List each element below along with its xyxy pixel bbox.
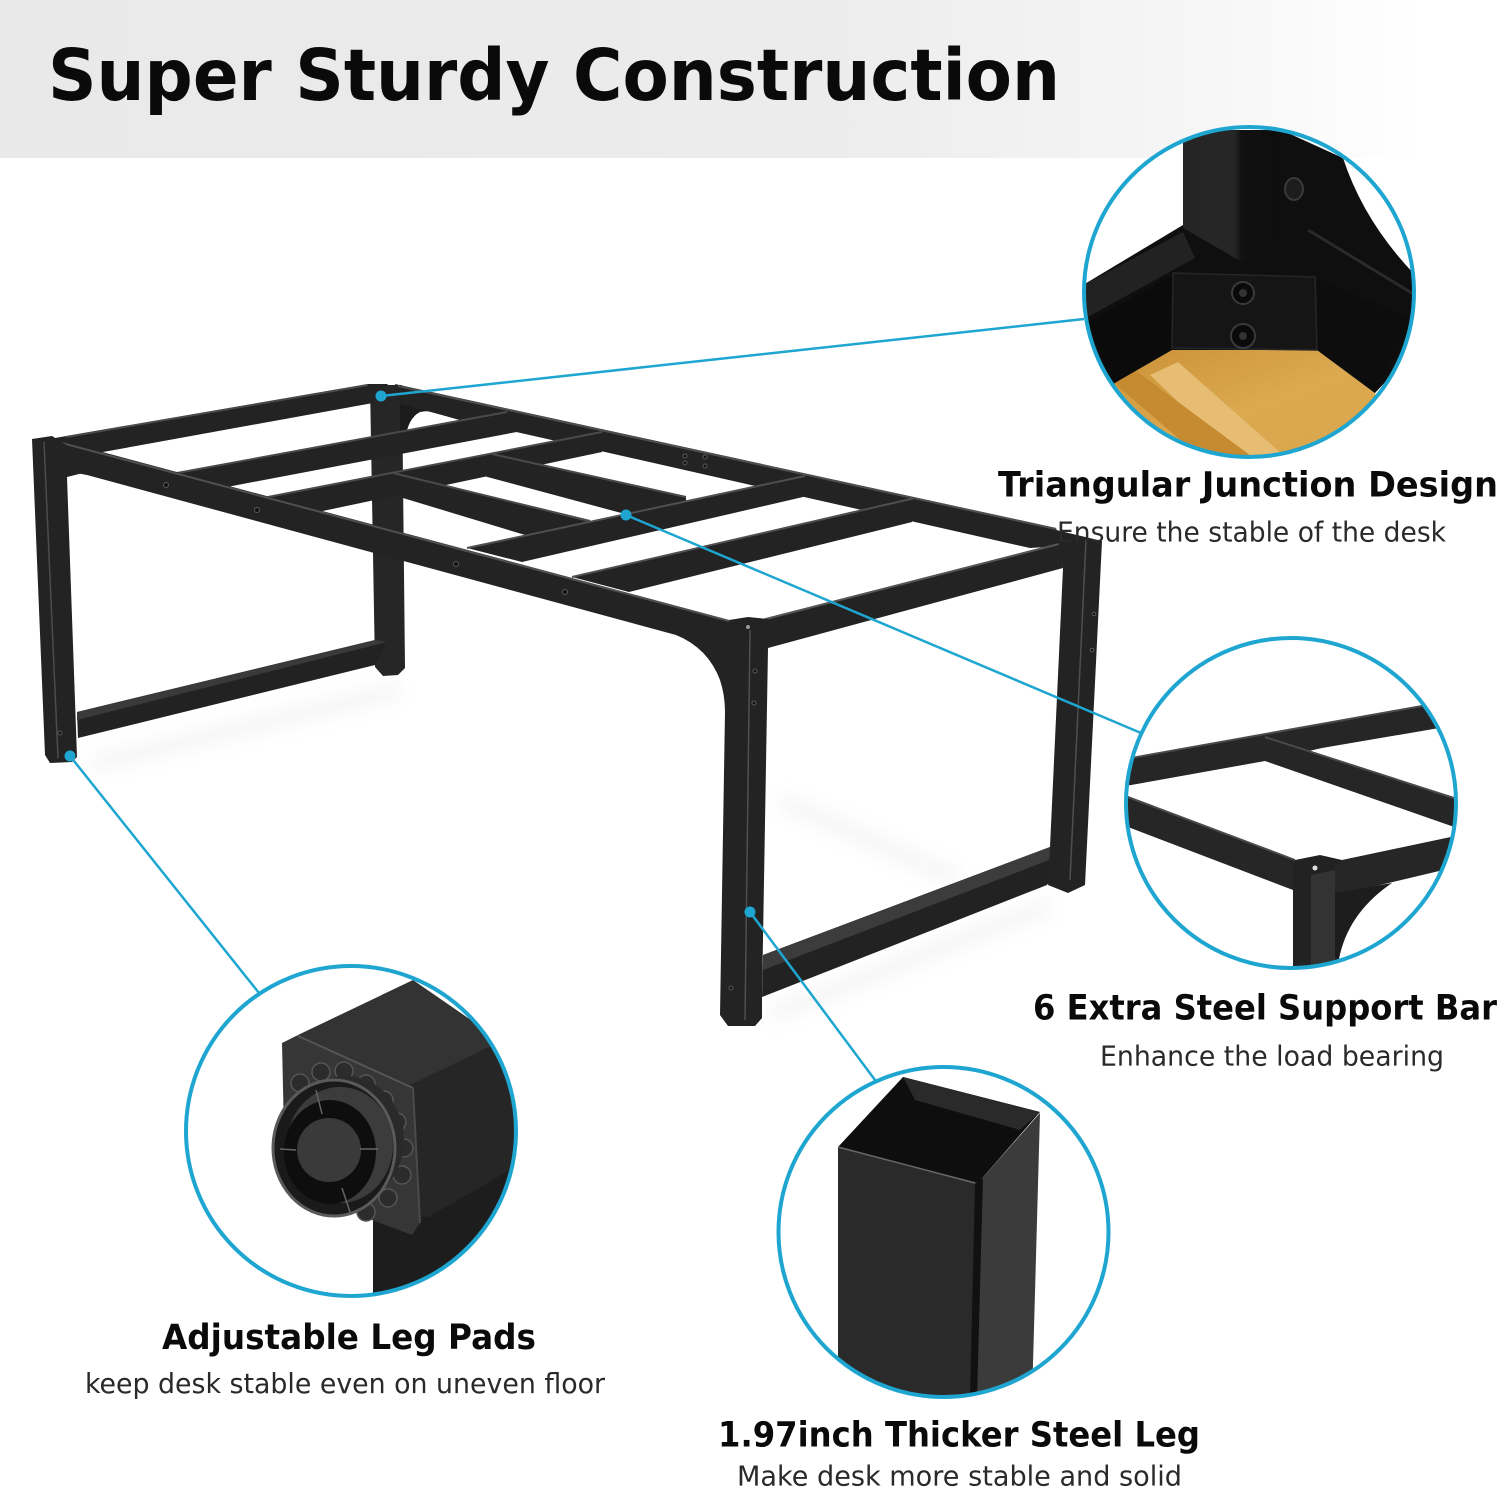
heading: thicker steel leg: 1.97inch Thicker Steel Leg — [718, 1416, 1200, 1456]
title: Super Sturdy Construction — [48, 34, 1060, 117]
front long rail — [50, 438, 768, 660]
support bar 4 — [572, 497, 915, 592]
header band — [0, 0, 1500, 158]
right lower bar — [762, 847, 1070, 997]
right leg — [1048, 530, 1102, 893]
circle: thicker steel leg detail — [778, 1066, 1110, 1400]
support bar 3 — [467, 475, 805, 562]
back left leg — [370, 385, 405, 676]
front corner leg with gusset — [676, 624, 768, 1026]
circle: adjustable leg pad detail — [185, 965, 525, 1300]
subtext: leg pads: keep desk stable even on uneven floor — [85, 1367, 605, 1400]
floor shadows — [90, 690, 1050, 1015]
subtext: support bar: Enhance the load bearing — [1100, 1040, 1444, 1072]
back short rail — [55, 384, 388, 452]
left lower bar — [77, 640, 387, 738]
heading: adjustable leg pads: Adjustable Leg Pads — [162, 1318, 536, 1358]
circle: triangular junction detail — [1083, 126, 1420, 470]
circle: support bar detail — [1120, 637, 1460, 975]
desk frame illustration — [32, 384, 1102, 1026]
subtext: triangular junction: Ensure the stable of the desk — [1057, 516, 1447, 548]
support bar 1 — [177, 411, 522, 487]
back long rail — [395, 384, 1062, 548]
longitudinal support bar 1 — [393, 473, 590, 538]
callout: leg pad line — [64, 750, 259, 993]
mounting holes — [58, 454, 1096, 990]
knob scallops — [291, 1062, 413, 1221]
front-left leg — [32, 436, 87, 763]
longitudinal support bar 2 — [480, 454, 686, 514]
callout: triangular junction line — [376, 319, 1084, 402]
back gusset — [400, 403, 470, 440]
front short rail — [745, 543, 1063, 650]
support bar 2 — [268, 432, 602, 512]
callout: support bar line — [620, 510, 1141, 733]
callout: steel leg line — [744, 906, 875, 1080]
